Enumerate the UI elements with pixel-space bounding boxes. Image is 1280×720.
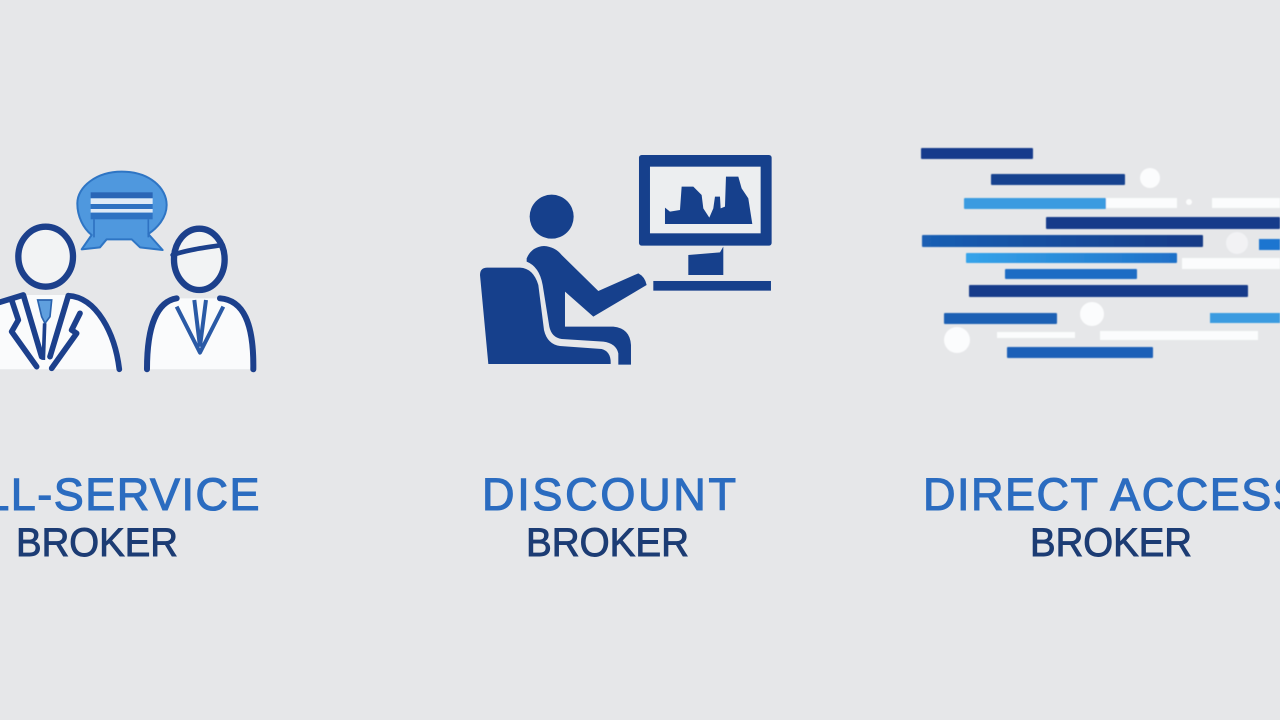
label: discount broker: [482, 469, 736, 565]
label: direct access broker: BROKER: [1030, 521, 1192, 565]
person: right advisor: [147, 229, 254, 369]
icon: discount broker at a computer: [480, 155, 772, 365]
monitor: [639, 155, 772, 291]
label: full-service broker: [0, 469, 261, 565]
person seated: [480, 195, 647, 365]
icon: direct access order streams: [921, 148, 1280, 358]
speech bubble: [77, 172, 167, 250]
label: full-service broker: BROKER: [16, 521, 178, 565]
blue order bars: [921, 148, 1280, 358]
icon: full-service brokers in conversation: [0, 172, 254, 369]
white data streaks: [944, 168, 1280, 353]
person: left advisor: [0, 227, 121, 369]
label: discount broker: BROKER: [526, 521, 689, 565]
label: discount broker: DISCOUNT: [482, 469, 736, 520]
label: direct access broker: [923, 469, 1280, 565]
